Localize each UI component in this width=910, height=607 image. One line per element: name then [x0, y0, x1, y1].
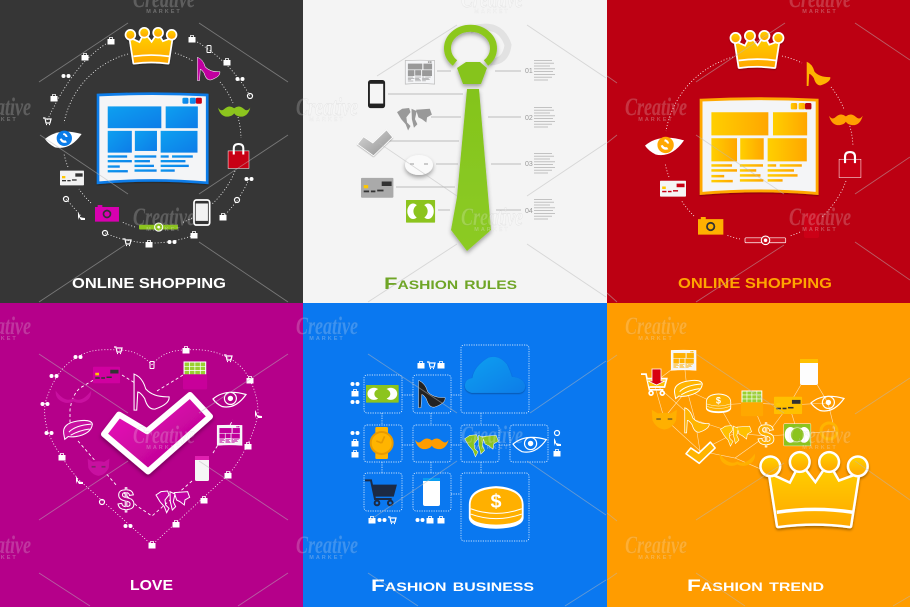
icon: cloud [465, 357, 525, 393]
watermarks: Creative [296, 94, 358, 121]
watermarks: Creative [461, 204, 523, 231]
heading: ONLINE SHOPPING [678, 275, 832, 292]
icon: heel black [419, 381, 445, 408]
watermarks: MARKET [146, 445, 182, 451]
icon: white mask [405, 155, 433, 175]
icon: lips [56, 391, 91, 403]
icon: money [784, 424, 811, 446]
watermarks: Creative [133, 422, 195, 449]
heading: LOVE [130, 577, 173, 594]
icon: phone [194, 200, 210, 225]
icon: eye [45, 131, 82, 148]
heading: Fashion trend [687, 576, 824, 595]
icon: camera [95, 205, 119, 222]
text blocks [534, 60, 555, 219]
icon: crown [731, 32, 783, 67]
watermarks: MARKET [309, 555, 345, 561]
numbers: 02 [525, 115, 533, 122]
small icons [350, 362, 561, 524]
icon: bag [228, 144, 249, 168]
panel: fashion rules [303, 0, 607, 303]
watermarks: MARKET [638, 555, 674, 561]
numbers: 03 [525, 161, 533, 168]
watermarks: MARKET [146, 9, 182, 15]
watermarks: MARKET [474, 9, 510, 15]
icon: credit card [660, 181, 686, 197]
icon: phone [195, 456, 209, 481]
numbers [525, 68, 533, 215]
watermarks: MARKET [309, 117, 345, 123]
numbers: 01 [525, 68, 533, 75]
icon: dollar: $ [118, 484, 135, 517]
heading: Fashion business [371, 576, 534, 595]
icon: tie [448, 28, 494, 251]
heading: ONLINE SHOPPING [72, 275, 226, 292]
icon: browser [671, 350, 696, 370]
small icons ring [43, 36, 254, 248]
icon: browser window [98, 94, 207, 183]
icon: heel [198, 58, 220, 80]
icon: coins [470, 487, 523, 528]
watermarks: MARKET [802, 445, 838, 451]
watermarks: MARKET [802, 9, 838, 15]
icon: credit card [60, 171, 84, 185]
dotted ring [47, 39, 250, 243]
icon: crown [126, 29, 176, 63]
icon: card [93, 367, 120, 383]
icon: lips [720, 454, 755, 466]
tie collar shadow [470, 27, 508, 62]
icon: heel [685, 408, 709, 433]
icon: camera [698, 217, 723, 235]
icon: money [406, 200, 435, 223]
numbers: 04 [525, 208, 533, 215]
outer heart [45, 350, 258, 545]
icon: dollar: $ [758, 419, 775, 452]
icon: red arrow [648, 369, 665, 385]
icon: check [686, 442, 715, 463]
icon: card grey [361, 178, 393, 198]
icon: watch [745, 236, 786, 245]
icon: heel outline [134, 374, 169, 410]
watermarks: MARKET [638, 117, 674, 123]
icon: watch [139, 223, 178, 231]
icon: eye outline [513, 437, 546, 452]
icon: cart [365, 480, 396, 505]
inner heart [70, 375, 233, 516]
icon: map [721, 426, 751, 445]
watermarks: Creative [296, 313, 358, 340]
icon: eye outline [213, 392, 246, 407]
icon: phone black [368, 80, 385, 108]
watermarks: Creative [789, 204, 851, 231]
watermarks: Creative [296, 532, 358, 559]
panel: online shopping red [607, 0, 910, 303]
icon: check mark [104, 395, 210, 471]
icon: check grey [358, 130, 392, 155]
icon: browser window [701, 99, 817, 193]
icon: faint phone [804, 213, 819, 238]
icon: ring [821, 423, 837, 439]
icon: bird [674, 380, 702, 399]
icon: watch [371, 427, 393, 459]
icon: coins [706, 394, 731, 413]
watermarks: Creative [133, 204, 195, 231]
icon: eye [645, 137, 684, 155]
icon: big crown [762, 453, 866, 526]
dotted boxes [364, 345, 548, 541]
watermarks: Creative [461, 422, 523, 449]
connector arrows [388, 71, 521, 210]
icon: mustache [829, 115, 863, 125]
watermarks: MARKET [802, 227, 838, 233]
watermarks: MARKET [309, 336, 345, 342]
icon: mustache [218, 106, 250, 117]
icon: eye outline [811, 396, 844, 411]
watermarks: Creative [625, 94, 687, 121]
icon: wallet [183, 362, 207, 389]
watermarks: Creative [625, 532, 687, 559]
watermarks: MARKET [146, 227, 182, 233]
panel: online shopping dark [0, 0, 303, 303]
heading: Fashion rules [384, 274, 517, 293]
icon: heel [807, 62, 830, 86]
icon: card [774, 397, 802, 414]
dotted ring [665, 56, 853, 239]
icon: cart [641, 374, 667, 395]
watermarks: Creative [625, 313, 687, 340]
panel: love [0, 303, 303, 607]
icon: browser [217, 425, 242, 445]
panel: fashion business [303, 303, 607, 607]
small icons [40, 346, 262, 548]
network lines [654, 360, 835, 476]
icon: bag [839, 152, 861, 177]
icon: map grey [397, 108, 432, 130]
icon: cat mask [652, 410, 677, 430]
watermarks: Creative [789, 422, 851, 449]
icon: bird outline [64, 420, 92, 439]
icon: browser grey [405, 60, 435, 84]
icon: phone [800, 359, 818, 385]
watermarks: MARKET [638, 336, 674, 342]
icon: wallet [741, 391, 763, 416]
icon: map outline [156, 491, 190, 513]
icon: phone [423, 478, 440, 506]
watermarks: MARKET [474, 445, 510, 451]
watermarks: MARKET [474, 227, 510, 233]
icon: map [465, 435, 498, 456]
icon: mustache [415, 439, 449, 449]
icon: cat mask [88, 459, 109, 476]
panel: fashion trend [607, 303, 910, 607]
icon: money [366, 385, 399, 403]
